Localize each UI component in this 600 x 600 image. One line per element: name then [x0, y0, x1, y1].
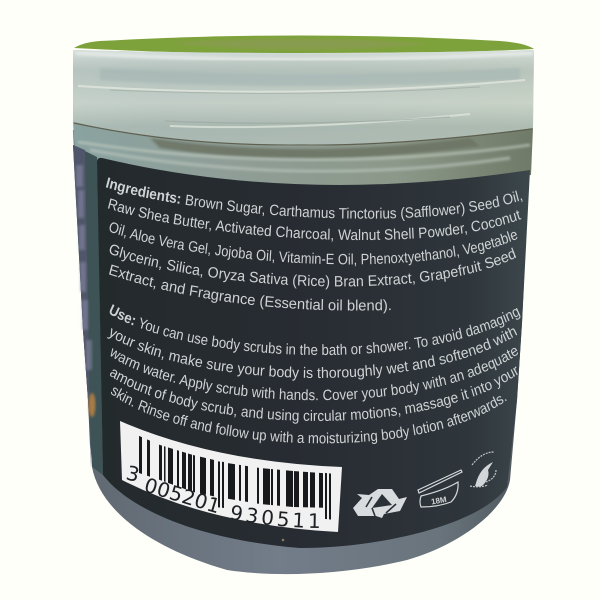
lid wall — [73, 50, 534, 146]
lid thread shadow lower — [165, 117, 450, 123]
barcode guard bars — [218, 461, 331, 520]
barcode — [120, 421, 342, 532]
ingredients text block: Extract, and Fragrance (Essential oil blend). — [109, 264, 391, 314]
product photo: jar back view — [73, 36, 534, 574]
lid upper highlight — [76, 53, 532, 60]
label background — [97, 158, 530, 548]
lid — [73, 36, 534, 146]
lid shade stripe — [100, 68, 520, 86]
barcode white panel — [120, 421, 342, 532]
rabbit body — [475, 462, 493, 487]
lid wall shading — [73, 50, 534, 146]
usage text block: warm water. Apply scrub with hands. Cover your body with an adequate — [110, 348, 518, 402]
lid bottom edge — [74, 123, 532, 145]
jar pot — [420, 482, 458, 507]
ingredients text block: Raw Shea Butter, Activated Charcoal, Walnut Shell Powder, Coconut — [108, 198, 522, 242]
label panel — [97, 158, 530, 548]
ingredients text block — [106, 177, 522, 314]
usage text block: your skin, make sure your body is thoroughly wet and softened with — [107, 328, 518, 381]
recycle blob — [353, 489, 407, 518]
usage text block: Use: You can use body scrubs in the bath or shower. To avoid damaging — [110, 304, 520, 356]
ingredients text block: Glycerin, Silica, Oryza Sativa (Rice) Bran Extract, Grapefruit Seed — [110, 244, 516, 290]
neck band under lid — [73, 122, 533, 187]
ingredients text block: Ingredients: Brown Sugar, Carthamus Tinctorius (Safflower) Seed Oil, — [106, 177, 522, 221]
recycle inner triangle — [372, 494, 392, 508]
icon: recycling symbol — [353, 489, 407, 518]
side strip text blocks — [76, 165, 92, 370]
18M text: 18M — [430, 495, 448, 506]
barcode bars — [139, 436, 323, 508]
open lid — [418, 470, 462, 493]
neck highlight — [78, 142, 530, 160]
green lid detail — [170, 39, 430, 50]
icon: cruelty free rabbit — [470, 452, 496, 487]
usage text block — [107, 304, 520, 444]
bottom base band — [73, 130, 531, 574]
side strip edge — [73, 145, 91, 470]
usage text block: skin. Rinse off and follow up with a moisturizing body lotion afterwards. — [110, 388, 507, 444]
icon: 18M period after opening jar — [418, 470, 462, 507]
neck highlight lower — [90, 150, 510, 171]
ingredients text block: Oil, Aloe Vera Gel, Jojoba Oil, Vitamin-E Oil, Phenoxtyethanol, Vegetable — [110, 222, 518, 266]
lid thread shadow upper — [110, 87, 480, 93]
speck on base — [282, 539, 284, 541]
jar body — [73, 122, 533, 574]
recycle slits — [366, 497, 396, 516]
barcode right digits: 930511 — [232, 505, 319, 528]
rabbit ring — [470, 452, 496, 487]
green lid top — [74, 36, 534, 54]
side strip brown logo — [88, 393, 96, 417]
barcode first digit: 3 — [124, 461, 142, 487]
lid thread ridge lower — [170, 114, 470, 127]
rim band shading — [150, 138, 480, 159]
lid thread ridge upper — [78, 80, 525, 92]
barcode left digits: 005201 — [146, 478, 217, 513]
usage text block: amount of body scrub, and using circular motions, massage it into your — [110, 366, 518, 424]
side strip, left — [73, 145, 103, 475]
